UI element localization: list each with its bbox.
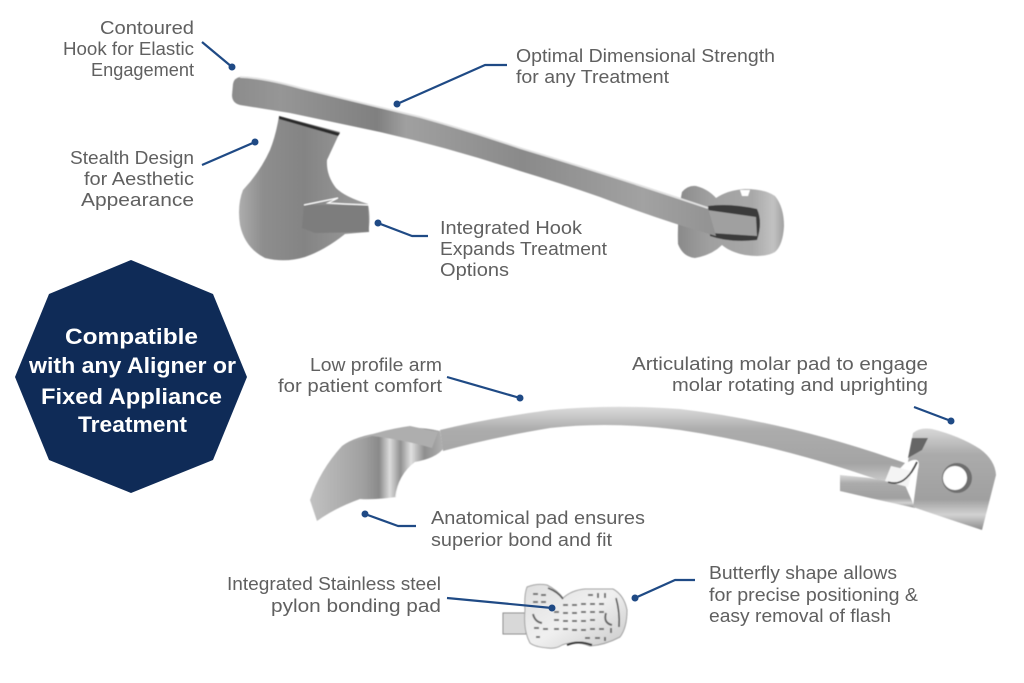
callout: stealth design: [70, 138, 258, 210]
callout: butterfly shape: for precise positioning &: [709, 584, 919, 605]
product image: lower bracket with pad: [310, 407, 996, 530]
callout: dimensional strength: for any Treatment: [516, 66, 669, 87]
callout: contoured hook: Hook for Elastic: [63, 38, 194, 59]
callout: stealth design: for Aesthetic: [84, 168, 194, 189]
callout: butterfly shape: easy removal of flash: [709, 605, 891, 626]
callout: stealth design: Stealth Design: [70, 147, 194, 168]
pad retention pattern: [533, 588, 619, 645]
callout: butterfly shape: [632, 562, 919, 626]
callout: stainless steel bonding pad: pylon bonding pad: [271, 595, 441, 616]
callout: contoured hook: Contoured: [100, 17, 194, 38]
butterfly pad outline: [525, 584, 627, 648]
upper bracket pylon body: [239, 116, 370, 260]
callout: contoured hook: [63, 17, 236, 80]
callout: integrated hook: [374, 217, 607, 280]
callout: low profile arm: for patient comfort: [278, 375, 442, 396]
badge: compatibility octagon: Fixed Appliance: [41, 384, 222, 409]
product image: upper bracket with hook: [232, 77, 784, 260]
callout: articulating molar pad: [632, 353, 954, 424]
callout: anatomical pad: Anatomical pad ensures: [431, 507, 645, 528]
upper bracket molar tube: [678, 186, 784, 258]
badge: compatibility octagon: Compatible: [65, 324, 198, 349]
badge: compatibility octagon: [15, 260, 247, 493]
lower bracket arm: [440, 407, 905, 483]
callout: stealth design: Appearance: [81, 189, 194, 210]
callout: integrated hook: Integrated Hook: [440, 217, 583, 238]
product image: butterfly bonding pad: [503, 584, 627, 648]
callout: stainless steel bonding pad: [227, 573, 556, 616]
bonding pad tab: [503, 613, 526, 634]
lower bracket molar tube with hole: [840, 428, 996, 530]
callout: contoured hook: Engagement: [91, 59, 194, 80]
callout: articulating molar pad: molar rotating and uprighting: [672, 374, 928, 395]
badge: compatibility octagon: Treatment: [78, 412, 188, 437]
callout: articulating molar pad: Articulating molar pad to engage: [632, 353, 928, 374]
callout: dimensional strength: Optimal Dimensional Strength: [516, 45, 775, 66]
upper bracket arm: [232, 77, 716, 236]
callout: low profile arm: [278, 354, 524, 402]
badge: compatibility octagon: with any Aligner or: [28, 353, 236, 378]
callout: integrated hook: Options: [440, 259, 509, 280]
callout: low profile arm: Low profile arm: [310, 354, 442, 375]
callout: anatomical pad: [362, 507, 645, 550]
callout: integrated hook: Expands Treatment: [440, 238, 607, 259]
lower bracket anatomical pad: [310, 426, 443, 521]
callout: stainless steel bonding pad: Integrated Stainless steel: [227, 573, 441, 594]
callout: butterfly shape: Butterfly shape allows: [709, 562, 897, 583]
callout: anatomical pad: superior bond and fit: [431, 529, 612, 550]
callout: dimensional strength: [394, 45, 775, 108]
